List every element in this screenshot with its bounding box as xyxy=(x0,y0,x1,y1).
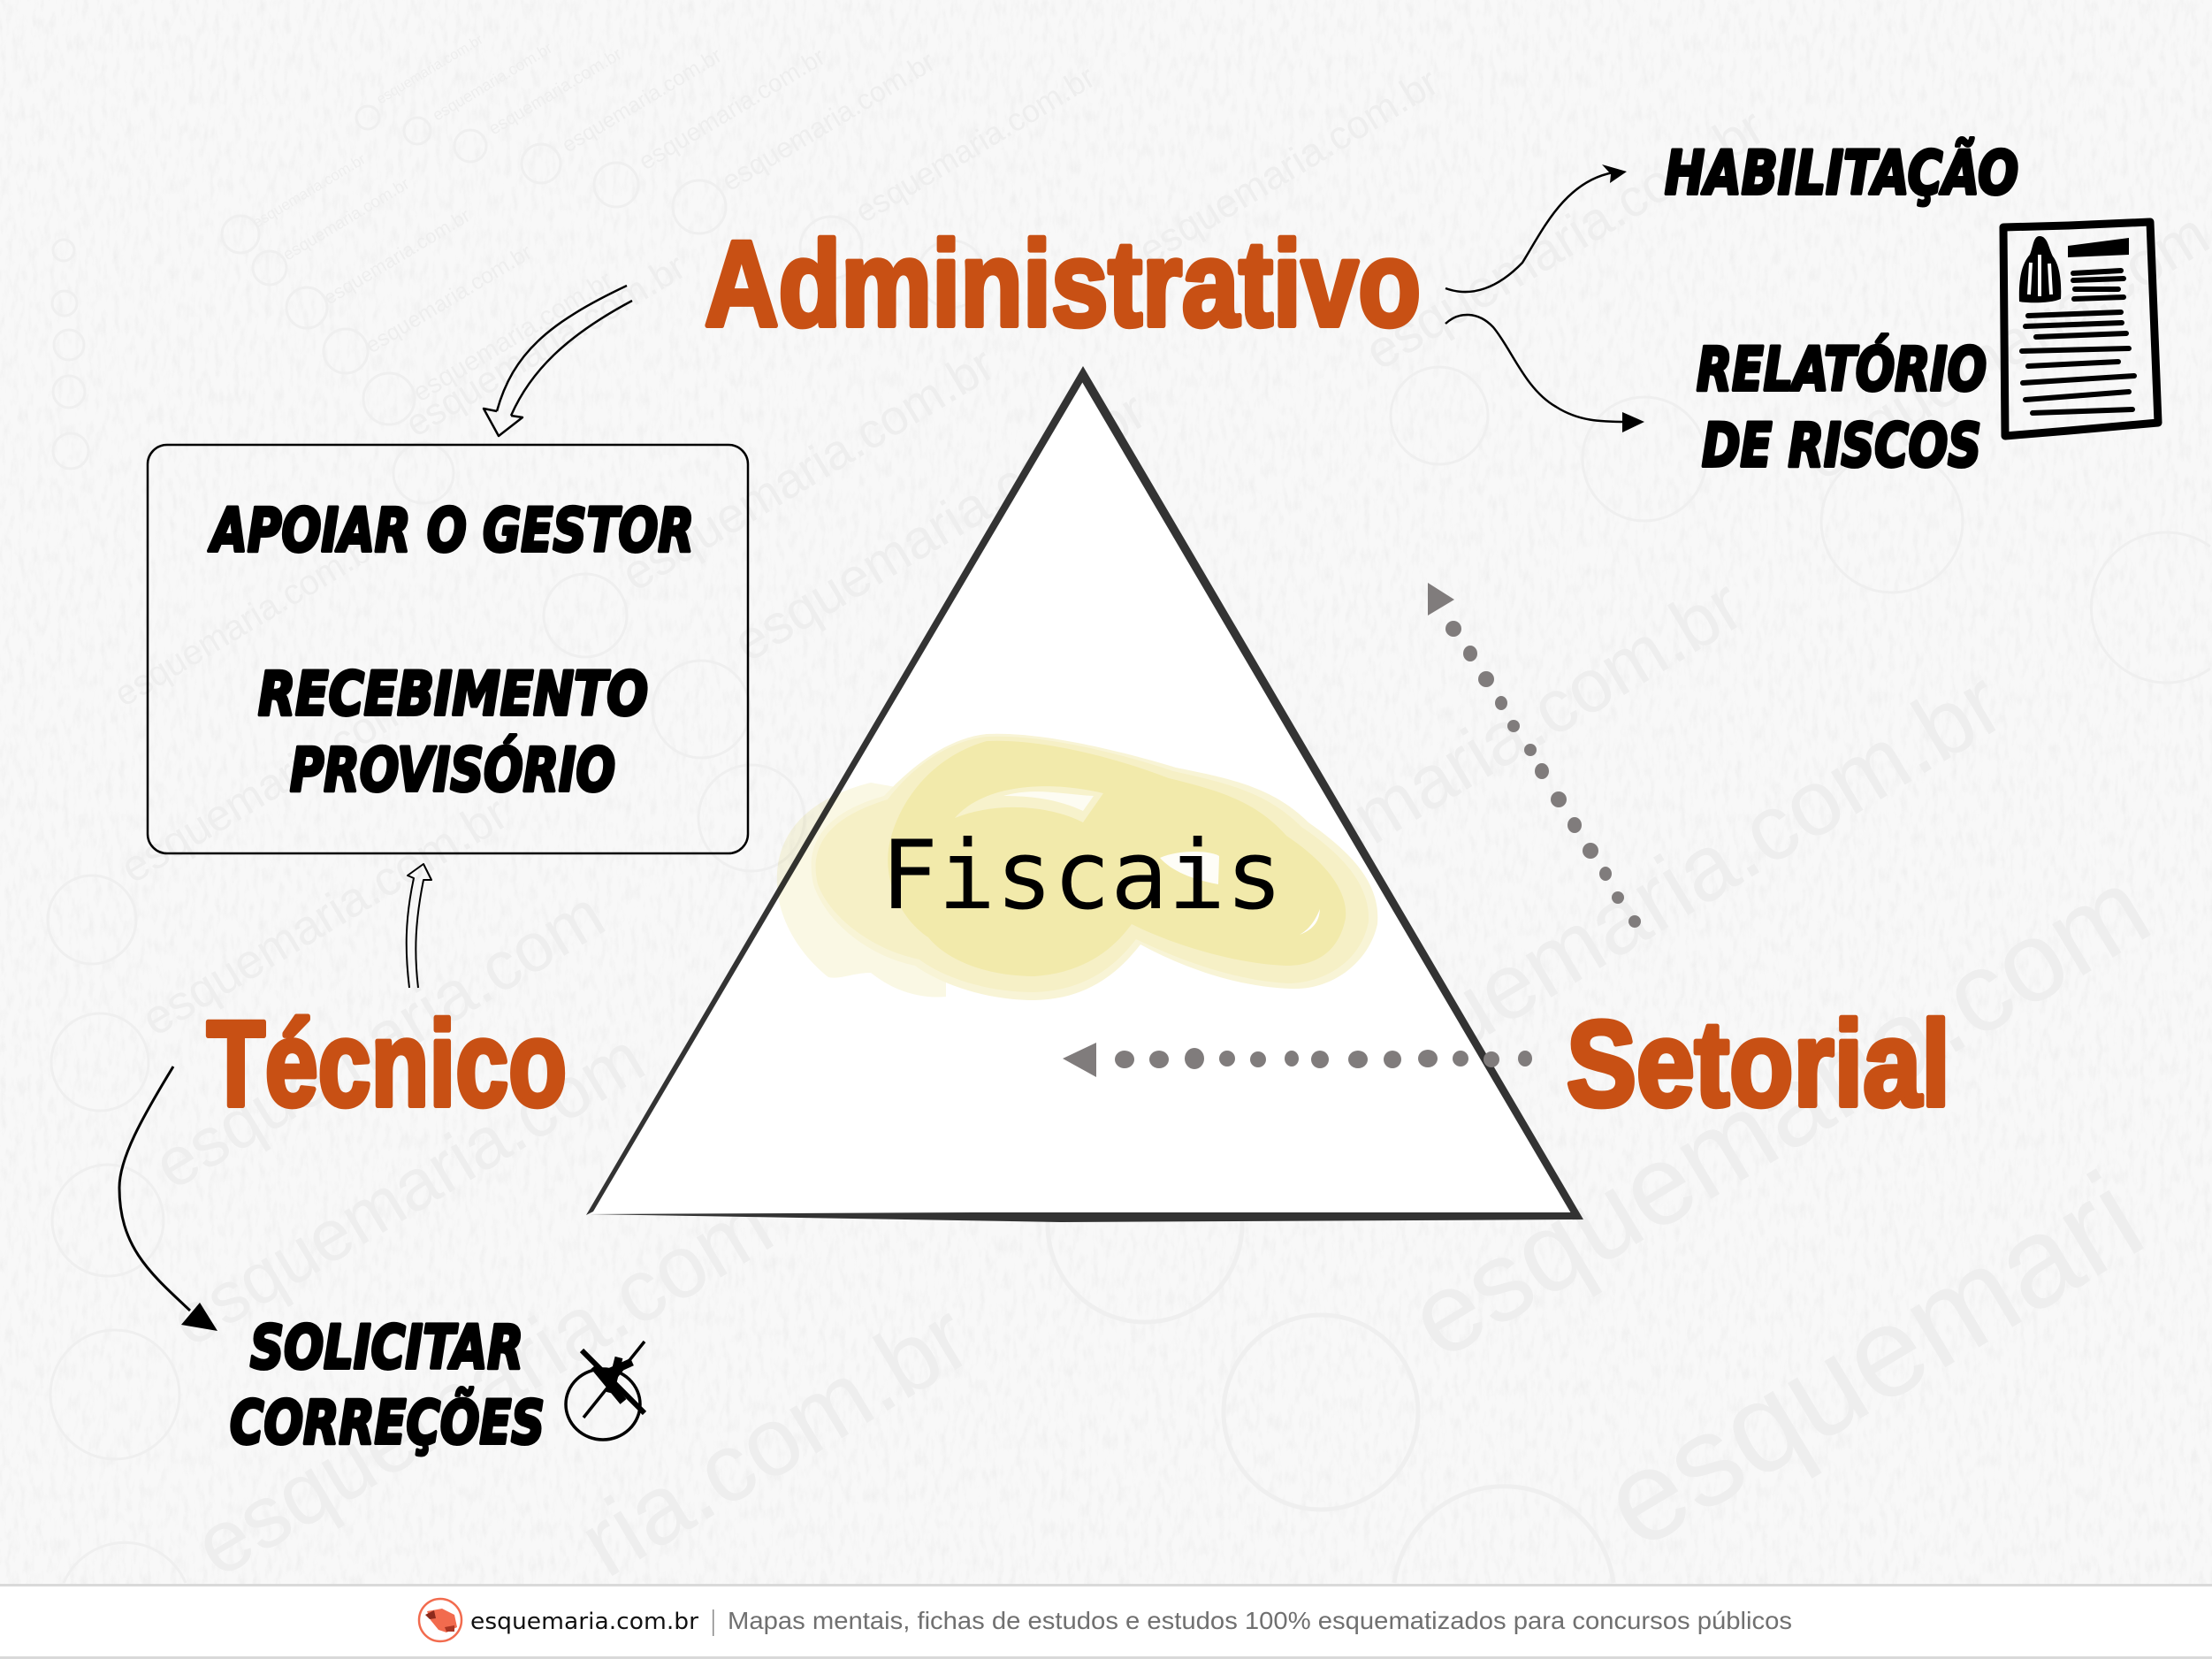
hollow arrow: Administrativo to box xyxy=(484,286,632,436)
watermark pattern: esquemaria.com.br xyxy=(485,44,626,139)
watermark pattern: esquemaria.com.br xyxy=(108,525,387,715)
footer bar xyxy=(0,1584,2212,1659)
watermark pattern: esquemari xyxy=(1579,1144,2165,1576)
watermark pattern: esquemaria.com.br xyxy=(849,58,1101,230)
text: HABILITAÇÃO: HABILITAÇÃO xyxy=(1665,138,2018,209)
arrow: to Relatório xyxy=(1445,315,1644,432)
watermark pattern: esquemaria.com.br xyxy=(408,265,618,408)
watermark pattern: esquemaria.com.br xyxy=(249,150,369,231)
watermark pattern: esquemaria.com.br xyxy=(280,174,414,264)
text: RELATÓRIO DE RISCOS: RELATÓRIO xyxy=(1697,334,1987,405)
watermark pattern: esquemaria.com.br xyxy=(1286,651,2020,1149)
watermark pattern: esquemaria.com.br xyxy=(634,42,830,175)
watermark pattern: esquemaria.com.br xyxy=(320,204,474,309)
watermark pattern: esquemaria.com.br xyxy=(1163,562,1757,966)
text: SOLICITAR CORREÇÕES xyxy=(230,1313,545,1458)
arrow: Técnico to Solicitar xyxy=(119,1066,217,1331)
yellow highlight blob xyxy=(777,734,1377,1000)
watermark pattern: esquemaria.com.br xyxy=(716,45,941,197)
text: RELATÓRIO DE RISCOS xyxy=(1697,334,1987,481)
watermark pattern: esquemaria.com xyxy=(140,875,617,1204)
watermark pattern: esquemaria.com xyxy=(1793,198,2212,493)
watermark pattern: esquemaria.com xyxy=(178,1174,789,1596)
icon: footer logo xyxy=(419,1599,461,1641)
watermark pattern: esquemaria.com.br xyxy=(558,43,726,157)
footer tagline: Mapas mentais, fichas de estudos e estudos 100% esquematizados para concursos públicos xyxy=(728,1607,1792,1634)
text: RELATÓRIO DE RISCOS: DE RISCOS xyxy=(1702,411,1981,481)
watermark pattern: esquemaria.com.br xyxy=(132,785,517,1046)
watermark pattern: esquemaria.com.br xyxy=(612,335,1003,601)
arrow: to Habilitação xyxy=(1445,164,1627,292)
watermark pattern: esquemaria.com.br xyxy=(398,245,692,445)
highlight gaps xyxy=(955,786,1320,935)
triangle xyxy=(586,366,1583,1222)
watermark pattern: esquemaria.com xyxy=(1388,844,2170,1383)
heading: Técnico: Técnico xyxy=(207,997,567,1132)
watermark pattern: esquemaria.com.br xyxy=(1131,58,1445,273)
text: SOLICITAR CORREÇÕES: CORREÇÕES xyxy=(230,1388,545,1458)
center label: Fiscais: Fiscais xyxy=(881,821,1283,931)
icon: crossed circle xyxy=(566,1342,645,1440)
heading: Administrativo: Administrativo xyxy=(705,217,1421,352)
text: RECEBIMENTO PROVISÓRIO xyxy=(258,660,648,806)
watermark pattern: esquemaria.com xyxy=(156,1017,658,1362)
footer site name: esquemaria.com.br xyxy=(470,1609,698,1635)
watermark pattern: esquemaria.com.br xyxy=(374,32,486,107)
watermark pattern: esquemaria.com.br xyxy=(112,655,462,892)
watermark pattern: esquemaria.com.br xyxy=(430,39,555,124)
watermark pattern: esquemaria.com.br xyxy=(1354,96,1774,381)
icon: report document xyxy=(2003,222,2158,436)
text: RECEBIMENTO PROVISÓRIO: RECEBIMENTO xyxy=(258,660,648,730)
watermark pattern: ria.com.br xyxy=(561,1281,988,1598)
panel: duties box xyxy=(148,445,748,853)
watermark pattern: esquemaria.com.br xyxy=(723,380,1156,674)
hollow arrow: Técnico to box xyxy=(407,864,431,988)
text: SOLICITAR CORREÇÕES: SOLICITAR xyxy=(250,1313,523,1383)
watermark pattern: esquemaria.com.br xyxy=(362,240,537,358)
dotted arrow: Setorial to Administrativo xyxy=(1428,583,1641,928)
dotted arrow: Setorial to Fiscais xyxy=(1063,1043,1532,1077)
text: APOIAR O GESTOR: APOIAR O GESTOR xyxy=(208,496,694,566)
text: RECEBIMENTO PROVISÓRIO: PROVISÓRIO xyxy=(290,735,615,806)
heading: Setorial: Setorial xyxy=(1567,997,1950,1132)
